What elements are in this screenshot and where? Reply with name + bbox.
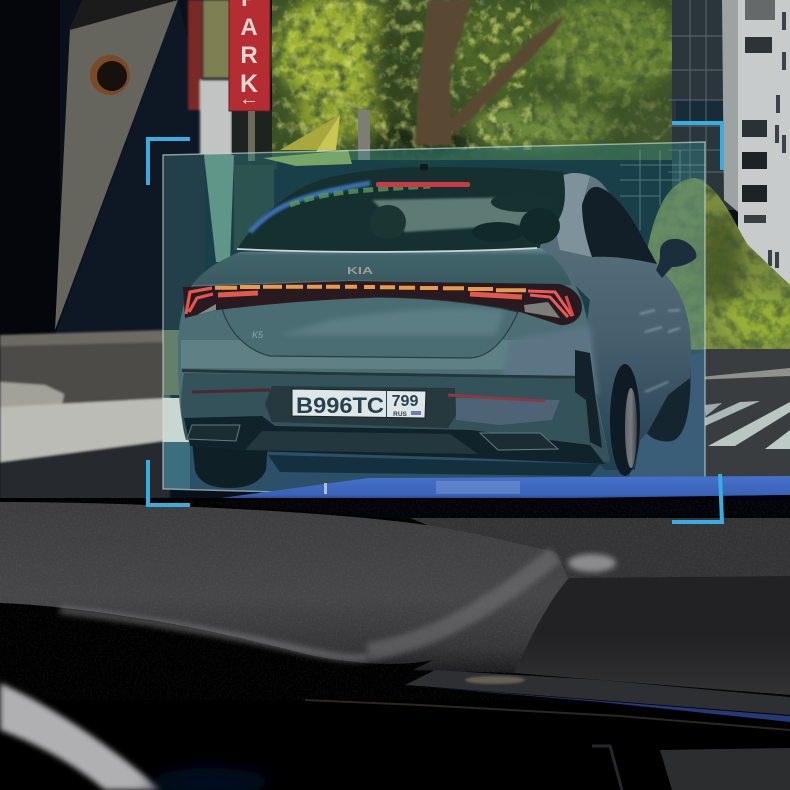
rear window: [237, 164, 565, 252]
road right with crosswalk: [680, 349, 790, 479]
porthole on wedge: [90, 55, 130, 95]
high-mounted brake light: [376, 182, 470, 187]
left exhaust: [187, 425, 240, 441]
detection panel: translucent teal overlay: [163, 142, 705, 503]
license plate: 799: [392, 393, 418, 410]
parking sign: A: [240, 14, 258, 41]
sign post: [248, 111, 255, 161]
dark band under windshield: [190, 495, 790, 520]
mirror: [656, 239, 696, 278]
rear quarter highlight: [500, 325, 598, 395]
panel storefront: [234, 165, 274, 250]
yellow paper plane sculpture: [263, 115, 352, 166]
pillar with red stripe: [188, 0, 232, 155]
kia logo: KIA: [347, 266, 373, 277]
parking sign: K: [240, 70, 258, 98]
panel dark left zone: [163, 150, 205, 345]
bumper crease: [182, 369, 592, 379]
console bracket: [592, 746, 622, 790]
bumper light band: [181, 340, 592, 370]
right street tree: [648, 178, 790, 349]
trim strip: [405, 670, 790, 715]
license plate: B996TC: [296, 393, 384, 418]
sidewalk and road left: [0, 330, 170, 500]
dash grain: [0, 500, 790, 700]
dark storefront behind sign: [232, 110, 277, 170]
right lamp chevrons: [470, 294, 522, 297]
panel right glass facade: [620, 150, 705, 230]
rear dash shelf: [410, 518, 790, 580]
side of car: [540, 174, 691, 470]
trunk emblem: K5: [252, 330, 264, 340]
instrument hood panel: [514, 576, 790, 695]
rear left wheel: [192, 440, 268, 488]
red reflectors: [192, 390, 270, 392]
glass building: [668, 0, 740, 212]
concrete wedge structure: [55, 0, 178, 330]
lower diffuser: [184, 416, 605, 464]
panel road zone bottom: [190, 446, 630, 491]
lower bumper: [181, 373, 610, 462]
side vent: [575, 350, 602, 448]
lower right console: [660, 748, 790, 790]
street post right of sculpture: [358, 110, 370, 160]
silver roof pillar: [546, 173, 592, 257]
tree trunk and branches: [415, 0, 565, 145]
panel pillar reflection: [204, 155, 234, 262]
left lamp chevrons: [186, 288, 213, 314]
hood reflection band: [185, 476, 790, 503]
detection bracket: bottom left: [148, 460, 190, 505]
parking sign: R: [240, 42, 258, 69]
plate surround: [265, 386, 456, 428]
glare spot: [568, 554, 616, 572]
rear wheel near side: [610, 364, 640, 476]
far front wheel: [646, 360, 690, 441]
panel left strip road: [163, 398, 190, 445]
lower right bumper light reflection: [456, 398, 560, 425]
license plate: [292, 389, 426, 418]
dashboard: [0, 495, 790, 790]
trunk lid: [222, 297, 518, 358]
white office building: [738, 0, 790, 285]
tan accent line: [305, 700, 790, 730]
rear body: [178, 248, 610, 462]
steering wheel: [0, 683, 161, 790]
detection bracket: top right: [672, 123, 722, 170]
side window: [582, 187, 657, 264]
trunk reflection: [280, 308, 505, 335]
parking sign: ←: [239, 88, 259, 110]
door reflections: [640, 310, 680, 392]
blue trim line: [416, 686, 790, 722]
tail light bar: [183, 281, 582, 325]
car: [178, 164, 696, 488]
panel right tree tint: [648, 178, 705, 350]
detection bracket: top left: [148, 139, 190, 185]
under-car shadow: [268, 455, 600, 476]
amber dashes: [215, 287, 526, 290]
rear deck: [192, 248, 572, 285]
panel road zone left: [163, 442, 190, 489]
wheel blue reflection: [150, 768, 270, 790]
silver trim glare: [465, 676, 525, 684]
right exhaust: [480, 433, 558, 450]
panel left strip lit ground: [163, 330, 179, 395]
detection bracket: bottom right: [672, 474, 722, 522]
diffuser strip: [245, 431, 478, 454]
main dash top: [0, 502, 569, 673]
parking sign: [229, 0, 270, 111]
dark blue wall: [55, 0, 200, 335]
dash edge highlight: [60, 610, 368, 658]
panel outline: [163, 142, 705, 503]
trees foliage: [272, 0, 682, 160]
dash ridge highlight: [368, 555, 555, 652]
dark corner left: [0, 0, 60, 335]
background: dark street scene: [0, 0, 790, 520]
license plate: RUS: [393, 411, 408, 418]
